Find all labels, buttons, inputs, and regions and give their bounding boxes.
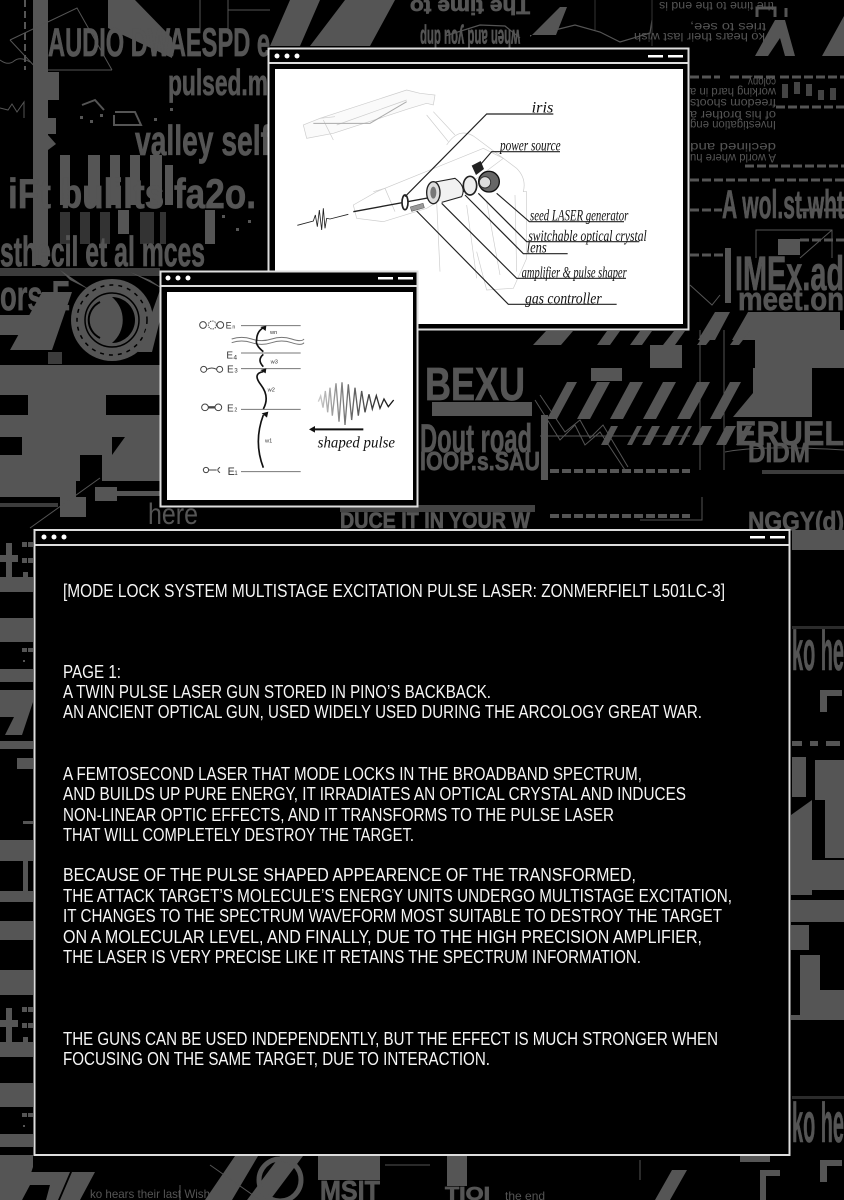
energy level sketch [200, 320, 395, 478]
heading: [MODE LOCK SYSTEM MULTISTAGE EXCITATION PULSE LASER: ZONMERFIELT L501LC-3] [63, 581, 725, 601]
energy level sketch: E [228, 466, 235, 478]
text block: guns used independently: FOCUSING ON THE SAME TARGET, DUE TO INTERACTION. [63, 1049, 490, 1069]
energy level sketch: w2 [267, 388, 275, 394]
background: reversed text column, upper right: declined and [690, 140, 776, 154]
background: reversed text column, upper right: freedom shoots [690, 96, 776, 110]
text block: femtosecond laser [63, 764, 686, 845]
text block: pulse shaping: IT CHANGES TO THE SPECTRUM WAVEFORM MOST SUITABLE TO DESTROY THE TARGET [63, 906, 722, 926]
background: reversed text column, upper right: Investigation eng [690, 118, 776, 132]
text block: pulse shaping: THE LASER IS VERY PRECISE LIKE IT RETAINS THE SPECTRUM INFORMATION. [63, 947, 641, 967]
background: reversed text column, upper right: ko hears their last wish [634, 30, 765, 44]
energy level sketch: 1 [234, 471, 238, 477]
background: right edge strip [791, 530, 844, 1182]
energy level sketch: E [226, 350, 233, 361]
laser gun sketch with callouts: gas controller [525, 290, 602, 307]
background: centre right stripes and blocks [340, 330, 844, 536]
background: centre right stripes and blocks: DIDM [748, 437, 810, 468]
energy level sketch: shaped pulse [318, 434, 395, 451]
background: top-left glitch typography: sthecil et al mces [0, 228, 205, 275]
background: centre right stripes and blocks: DUCE IT IN YOUR W [340, 508, 530, 533]
background: top-left glitch typography: AUDIO DWAESPD e [48, 21, 270, 65]
text block: pulse shaping: THE ATTACK TARGET’S MOLECULE’S ENERGY UNITS UNDERGO MULTISTAGE EXCITATION, [63, 886, 732, 906]
text block: femtosecond laser: AND BUILDS UP PURE ENERGY, IT IRRADIATES AN OPTICAL CRYSTAL AND INDUCES [63, 784, 686, 804]
text block: pulse shaping: ON A MOLECULAR LEVEL, AND FINALLY, DUE TO THE HIGH PRECISION AMPLIFIER, [63, 927, 702, 947]
text block: femtosecond laser: A FEMTOSECOND LASER THAT MODE LOCKS IN THE BROADBAND SPECTRUM, [63, 764, 642, 784]
laser gun sketch with callouts: power source [499, 137, 561, 154]
energy level sketch: n [232, 324, 235, 330]
background: lower-left blocks: here [148, 498, 198, 531]
energy level sketch: w3 [270, 359, 278, 365]
text block: page 1 intro [63, 662, 702, 722]
background: top-left glitch typography: pulsed.m [168, 62, 268, 103]
background: centre right stripes and blocks: IOOP.s.SAU [420, 446, 540, 476]
background: lower-left blocks [0, 365, 198, 531]
background: centre chart and dashed rows [535, 330, 844, 520]
background: top-left glitch typography: ors-E [0, 272, 70, 319]
laser gun sketch with callouts [297, 90, 647, 307]
energy level sketch: E [226, 320, 232, 330]
background: centre right stripes and blocks: BEXU [425, 358, 525, 410]
energy level sketch: E [227, 365, 234, 376]
energy level sketch: 2 [234, 408, 237, 414]
background: reversed text column, upper right: working hard in a [690, 85, 777, 99]
laser gun sketch with callouts: iris [532, 100, 553, 117]
energy level sketch: w1 [264, 438, 272, 444]
text block: guns used independently [63, 1029, 718, 1069]
background: reversed text column, upper right: A world where hu [690, 151, 776, 165]
window controls [166, 276, 413, 280]
background: top-left glitch typography [0, 0, 271, 319]
background: top-left glitch typography: iFt bulilts fa2o. [8, 170, 256, 217]
text block: guns used independently: THE GUNS CAN BE USED INDEPENDENTLY, BUT THE EFFECT IS MUCH STRONGER WHEN [63, 1029, 718, 1049]
text block: pulse shaping [63, 865, 732, 967]
laser gun sketch with callouts: amplifier & pulse shaper [522, 265, 627, 282]
energy level sketch: wn [269, 330, 277, 336]
background: reversed text column, upper right: of his brother a [690, 108, 776, 122]
text block: femtosecond laser: THAT WILL COMPLETELY DESTROY THE TARGET. [63, 825, 414, 845]
laser gun sketch with callouts: seed LASER generator [530, 207, 629, 224]
text block: page 1 intro: PAGE 1: [63, 662, 121, 682]
panel: energy level diagram window [160, 272, 418, 506]
background: bottom strip [0, 1156, 780, 1200]
text block: page 1 intro: A TWIN PULSE LASER GUN STORED IN PINO’S BACKBACK. [63, 682, 491, 702]
text block: femtosecond laser: NON-LINEAR OPTIC EFFECTS, AND IT TRANSFORMS TO THE PULSE LASER [63, 805, 614, 825]
background: reversed text column, upper right: tries to see, [690, 20, 766, 34]
laser gun sketch with callouts: lens [527, 240, 547, 257]
energy level sketch: 3 [234, 369, 238, 375]
background: reversed text column, upper right: colony [748, 75, 776, 89]
energy level sketch: 4 [233, 355, 237, 362]
window controls [42, 534, 785, 540]
background: top-left glitch typography: valley self [135, 117, 271, 164]
text block: page 1 intro: AN ANCIENT OPTICAL GUN, USED WIDELY USED DURING THE ARCOLOGY GREAT WAR. [63, 702, 702, 722]
background: top centre: when and you dnp [420, 24, 520, 54]
laser gun sketch with callouts: switchable optical crystal [528, 228, 647, 245]
background: gear emblem and slashes [0, 270, 165, 364]
panel: description text window [34, 530, 790, 1155]
background: centre right stripes and blocks: Dout road [420, 417, 532, 461]
background: reversed text column, upper right [634, 0, 844, 340]
background: top centre [270, 0, 652, 54]
background: left edge strip [0, 542, 33, 1200]
window controls [274, 54, 683, 58]
panel: laser gun diagram window [268, 48, 688, 330]
energy level sketch: E [227, 404, 234, 415]
text block: pulse shaping: BECAUSE OF THE PULSE SHAPED APPEARENCE OF THE TRANSFORMED, [63, 865, 636, 885]
